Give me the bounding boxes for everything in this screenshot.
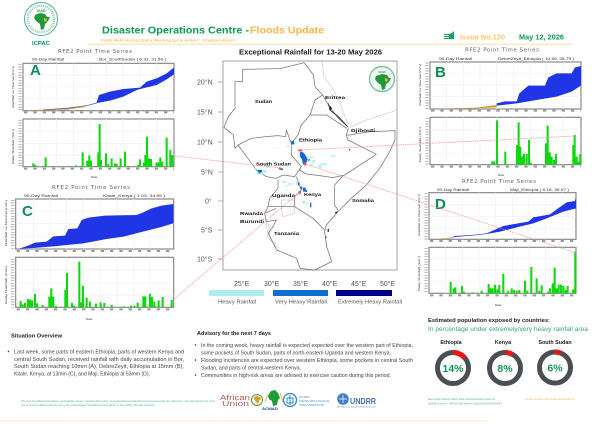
population exposure panel bbox=[428, 318, 589, 384]
rainfall patches bbox=[255, 141, 350, 207]
title: Floods Update bbox=[250, 24, 324, 36]
map frame bbox=[223, 61, 397, 270]
logo: African Union: African bbox=[220, 395, 250, 402]
text block: situation overview: Kitale, Kenya, at 13mm (C), and Maji, Ethiopia at 53mm (D). bbox=[14, 372, 150, 378]
data sources: Contact: disaster-risk-management@icpac.net bbox=[525, 398, 575, 401]
chart panel A: Bor, South Sudan: Bor_SouthSudan ( 6.31, 31.56 ) bbox=[99, 58, 166, 62]
header bbox=[24, 2, 573, 47]
donut: Kenya: 8% bbox=[497, 363, 513, 375]
chart panel A: Bor, South Sudan: Date bbox=[91, 175, 98, 179]
legend: Heavy Rainfall bbox=[218, 300, 256, 306]
legend: Extremely Heavy Rainfall bbox=[338, 300, 402, 306]
chart panel B: DebreZeyit, Ethiopia bbox=[418, 48, 581, 177]
country labels bbox=[240, 95, 376, 237]
map panel: exceptional rainfall bbox=[197, 48, 397, 288]
title: Disaster Operations Centre - bbox=[102, 24, 250, 36]
longitude labels: 30°E bbox=[264, 280, 280, 288]
logo: WMO bbox=[284, 394, 331, 407]
central and southern borders bbox=[238, 125, 395, 270]
text block: situation overview: Situation Overview bbox=[11, 334, 63, 340]
chart panel A: Bor, South Sudan: Rainfall vs Normal (mm) bbox=[11, 66, 15, 108]
donut: Ethiopia: Ethiopia bbox=[440, 340, 463, 346]
chart panel B: DebreZeyit, Ethiopia: Date bbox=[498, 173, 505, 177]
chart panel C: Kitale, Kenya: C bbox=[22, 203, 33, 220]
donut: Ethiopia bbox=[438, 340, 468, 384]
title bbox=[102, 24, 324, 36]
legend: Very Heavy Rainfall bbox=[275, 300, 327, 306]
issue number: Issue No.120 bbox=[460, 34, 505, 42]
longitude labels bbox=[234, 280, 396, 288]
longitude labels: 25°E bbox=[234, 280, 250, 288]
donut: Ethiopia: 14% bbox=[442, 363, 464, 375]
text block: advisory: some pockets of South Sudan, parts of north-eastern Uganda and western Kenya. bbox=[201, 350, 391, 356]
chart panel D: Maji, Ethiopia: Maji_Ethiopia ( 6.18, 35.57 ) bbox=[510, 188, 569, 192]
exposure heading: Estimated population exposed by countries: bbox=[428, 318, 550, 324]
donut: South Sudan bbox=[538, 340, 572, 383]
icon: issue bbox=[444, 31, 454, 39]
chart panel C: Kitale, Kenya bbox=[4, 185, 174, 321]
logo: IGAD ICPAC bbox=[24, 2, 58, 47]
chart panel D: Maji, Ethiopia: Daily Rainfall (mm) bbox=[417, 256, 421, 291]
date: May 12, 2026 bbox=[519, 34, 564, 42]
data sources: Satellite Sources : ICPAC/IGAD Member States/NOAA/FEWSNET bbox=[428, 402, 503, 406]
longitude labels: 50°E bbox=[380, 280, 396, 288]
exposure subheading: In percentage under extremely/very heavy rainfall area bbox=[428, 326, 589, 333]
donut: Kenya bbox=[490, 340, 520, 384]
text block: situation overview bbox=[8, 334, 184, 378]
data sources: East Africa Hazards Watch: https://eahazardswatch.icpac.net bbox=[428, 398, 495, 401]
text block: situation overview: central South Sudan, received rainfall with daily accumulation in Bor, bbox=[14, 357, 184, 363]
data sources bbox=[428, 398, 575, 406]
latitude labels: 0° bbox=[205, 198, 212, 206]
text block: situation overview: South Sudan reaching 10mm (A), DebreZeyit, Ethiopia at 15mm (B), bbox=[14, 364, 184, 370]
text block: advisory: Advisory for the next 7 days bbox=[197, 331, 271, 337]
chart panel C: Kitale, Kenya: RFE2 Point Time Series bbox=[52, 185, 130, 191]
chart panel C: Kitale, Kenya: 90-Day Rainfall bbox=[24, 194, 58, 198]
red leader lines bbox=[173, 136, 576, 300]
disclaimer: free or implying official endorsement by the IGAD Disaster Operations Centre (DOC) or from ICPAC Member Countries bbox=[21, 404, 156, 407]
map title: Exceptional Rainfall for 13-20 May 2026 bbox=[239, 48, 382, 56]
chart panel C: Kitale, Kenya: Rainfall vs Normal (mm) bbox=[4, 200, 8, 246]
latitude labels: 15°N bbox=[197, 108, 213, 116]
logo: ACMAD bbox=[262, 390, 283, 411]
country labels: Uganda bbox=[272, 193, 295, 199]
logo: WMO: WORLD bbox=[299, 395, 309, 399]
donut: South Sudan: 6% bbox=[547, 362, 563, 374]
text block: advisory bbox=[195, 331, 413, 379]
legend bbox=[209, 290, 402, 306]
country labels: Rwanda bbox=[240, 211, 263, 217]
country labels: Kenya bbox=[304, 192, 321, 198]
latitude labels: 20°N bbox=[197, 78, 213, 86]
logo: UNDRR bbox=[337, 393, 376, 408]
chart panel A: Bor, South Sudan: Daily Rainfall (mm) bbox=[11, 129, 15, 164]
text block: advisory: Communities in high-risk areas are advised to exercise caution during this period. bbox=[201, 373, 391, 379]
chart panel B: DebreZeyit, Ethiopia: B bbox=[435, 64, 446, 81]
text block: advisory: Flooding incidences are expected over western Ethiopia, some pockets in central South bbox=[201, 358, 413, 364]
country labels: Djibouti bbox=[351, 128, 376, 134]
latitude labels: 5°S bbox=[201, 226, 213, 234]
logo: African Union: Union bbox=[222, 401, 249, 408]
logo: UNDRR: UN Office for Disaster Risk Reduction bbox=[337, 406, 376, 408]
chart panel A: Bor, South Sudan: 90-Day Rainfall bbox=[32, 58, 64, 62]
chart panel D: Maji, Ethiopia: RFE2 Point Time Series bbox=[462, 179, 536, 185]
logo: WMO: METEOROLOGICAL bbox=[299, 399, 331, 403]
map logo: IGAD: IGAD bbox=[378, 70, 386, 74]
country labels: South Sudan bbox=[256, 162, 291, 168]
logo: IGAD ICPAC: IGAD bbox=[37, 9, 46, 13]
text block: advisory: Sudan, and parts of central-western Kenya. bbox=[201, 366, 301, 372]
chart panel B: DebreZeyit, Ethiopia: RFE2 Point Time Series bbox=[465, 48, 539, 54]
chart panel D: Maji, Ethiopia: Date bbox=[495, 303, 502, 307]
country labels: Somalia bbox=[352, 198, 374, 204]
logo: WMO: ORGANIZATION bbox=[299, 403, 324, 407]
country labels: Ethiopia bbox=[299, 138, 322, 144]
subtitle: IGAD Multi-Hazard Early Warning Early Action - Situation-Room bbox=[101, 38, 236, 42]
logo: African Union bbox=[220, 394, 262, 408]
latitude labels bbox=[197, 78, 223, 264]
chart panel D: Maji, Ethiopia bbox=[417, 179, 576, 307]
chart panel B: DebreZeyit, Ethiopia: 90-Day Rainfall bbox=[439, 57, 472, 61]
chart panel D: Maji, Ethiopia: 90-Day Rainfall bbox=[437, 188, 469, 192]
chart panel A: Bor, South Sudan: RFE2 Point Time Series bbox=[58, 49, 132, 55]
country labels: Tanzania bbox=[274, 231, 299, 237]
longitude labels: 35°E bbox=[293, 280, 309, 288]
header rule bbox=[88, 43, 573, 46]
longitude labels: 45°E bbox=[351, 280, 367, 288]
chart panel B: DebreZeyit, Ethiopia: DebreZeyit_Ethiopia ( 10.56, 35.79 ) bbox=[498, 57, 574, 61]
country labels: Eritrea bbox=[325, 95, 345, 101]
chart panel B: DebreZeyit, Ethiopia: Rainfall vs Normal (mm) bbox=[418, 64, 422, 106]
chart panel D: Maji, Ethiopia: D bbox=[435, 196, 446, 213]
country labels: Sudan bbox=[255, 99, 272, 105]
chart panel B: DebreZeyit, Ethiopia: Daily Rainfall (mm) bbox=[418, 127, 422, 162]
latitude labels: 5°N bbox=[201, 168, 213, 176]
text block: advisory: In the coming week, heavy rainfall is expected expected over the western part of Ethiopia, bbox=[201, 343, 413, 349]
partner logos bbox=[220, 390, 376, 411]
logo: ACMAD: ACMAD bbox=[262, 407, 278, 411]
latitude labels: 10°S bbox=[197, 256, 213, 264]
chart panel A: Bor, South Sudan bbox=[11, 49, 174, 179]
chart panel D: Maji, Ethiopia: Rainfall vs Normal (mm) bbox=[417, 194, 421, 236]
disclaimer bbox=[21, 400, 215, 407]
map logo: IGAD bbox=[370, 66, 394, 92]
chart panel C: Kitale, Kenya: Daily Rainfall (mm) bbox=[4, 266, 8, 304]
chart panel C: Kitale, Kenya: Date bbox=[86, 317, 93, 321]
donut: Kenya: Kenya bbox=[495, 340, 512, 346]
text block: situation overview: Last week, some parts of eastern Ethiopia, parts of western Kenya and bbox=[14, 350, 184, 356]
footer rule bbox=[0, 420, 488, 422]
chart panel C: Kitale, Kenya: Kitale_Kenya ( 1.03, 34.99 ) bbox=[103, 194, 165, 198]
country labels: Burundi bbox=[240, 219, 265, 225]
longitude labels: 40°E bbox=[322, 280, 338, 288]
logo: IGAD ICPAC: ICPAC bbox=[32, 41, 50, 47]
latitude labels: 10°N bbox=[197, 138, 213, 146]
chart panel A: Bor, South Sudan: A bbox=[30, 62, 41, 79]
donut: South Sudan: South Sudan bbox=[538, 340, 572, 346]
disclaimer: The use of political boundaries, geographic names, related information, and potential considerations for response are for reference, not warranted to be error bbox=[21, 400, 215, 403]
logo: UNDRR: UNDRR bbox=[350, 397, 376, 406]
northern borders bbox=[224, 62, 397, 148]
